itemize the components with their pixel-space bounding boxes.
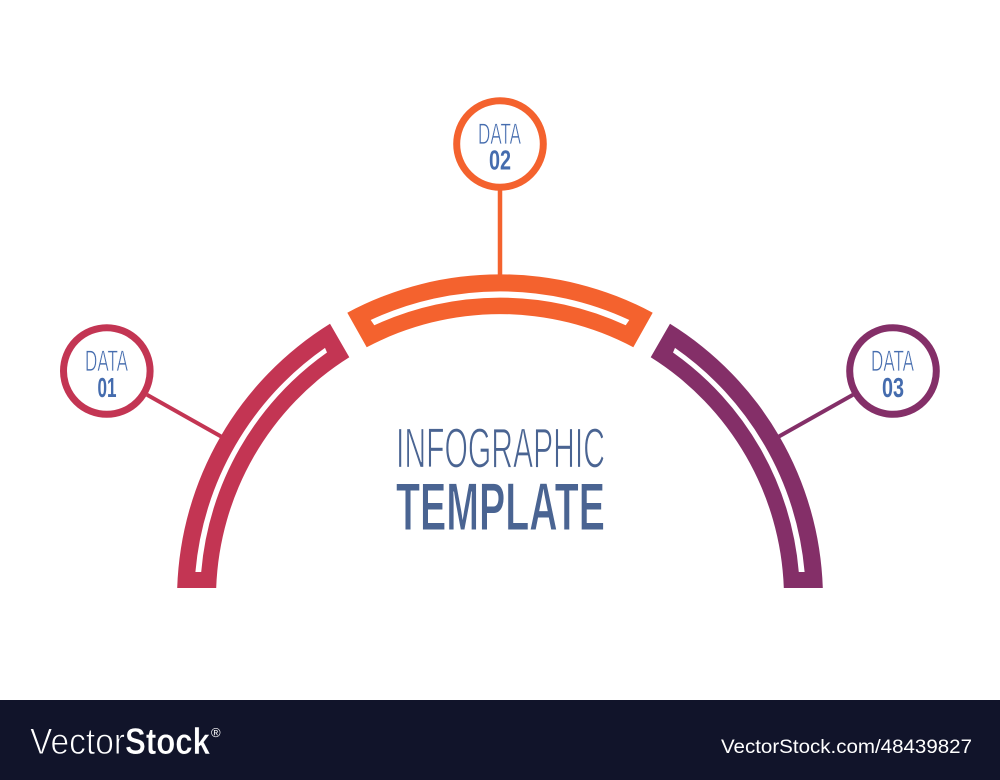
panel: data 01 step: [64, 324, 349, 588]
footer image id: VectorStock.com/48439827: [721, 736, 972, 758]
panel: data 02 step: [347, 101, 653, 347]
badge 03: [850, 328, 936, 414]
badge 02: DATA: [478, 118, 521, 151]
arc segment 02: [347, 274, 653, 347]
arc segment 03: [651, 324, 823, 588]
badge 03: 03: [882, 372, 904, 403]
title: [396, 416, 605, 545]
badge 02: [457, 101, 543, 187]
connector line 02: [498, 188, 502, 277]
badge 01: 01: [98, 372, 116, 403]
panel: data 03 step: [651, 324, 936, 588]
badge 01: DATA: [85, 345, 128, 378]
badge 01: [64, 328, 150, 414]
title: INFOGRAPHIC: [396, 416, 605, 480]
badge 03: DATA: [871, 345, 914, 378]
footer registered mark: ®: [211, 725, 221, 740]
connector line 03: [778, 395, 853, 437]
connector line 01: [147, 395, 222, 437]
badge 02: 02: [489, 144, 511, 176]
title: TEMPLATE: [396, 469, 605, 545]
arc segment 01: [177, 324, 349, 588]
footer bar: [0, 700, 1000, 780]
footer logo: VectorStock: [30, 721, 210, 762]
